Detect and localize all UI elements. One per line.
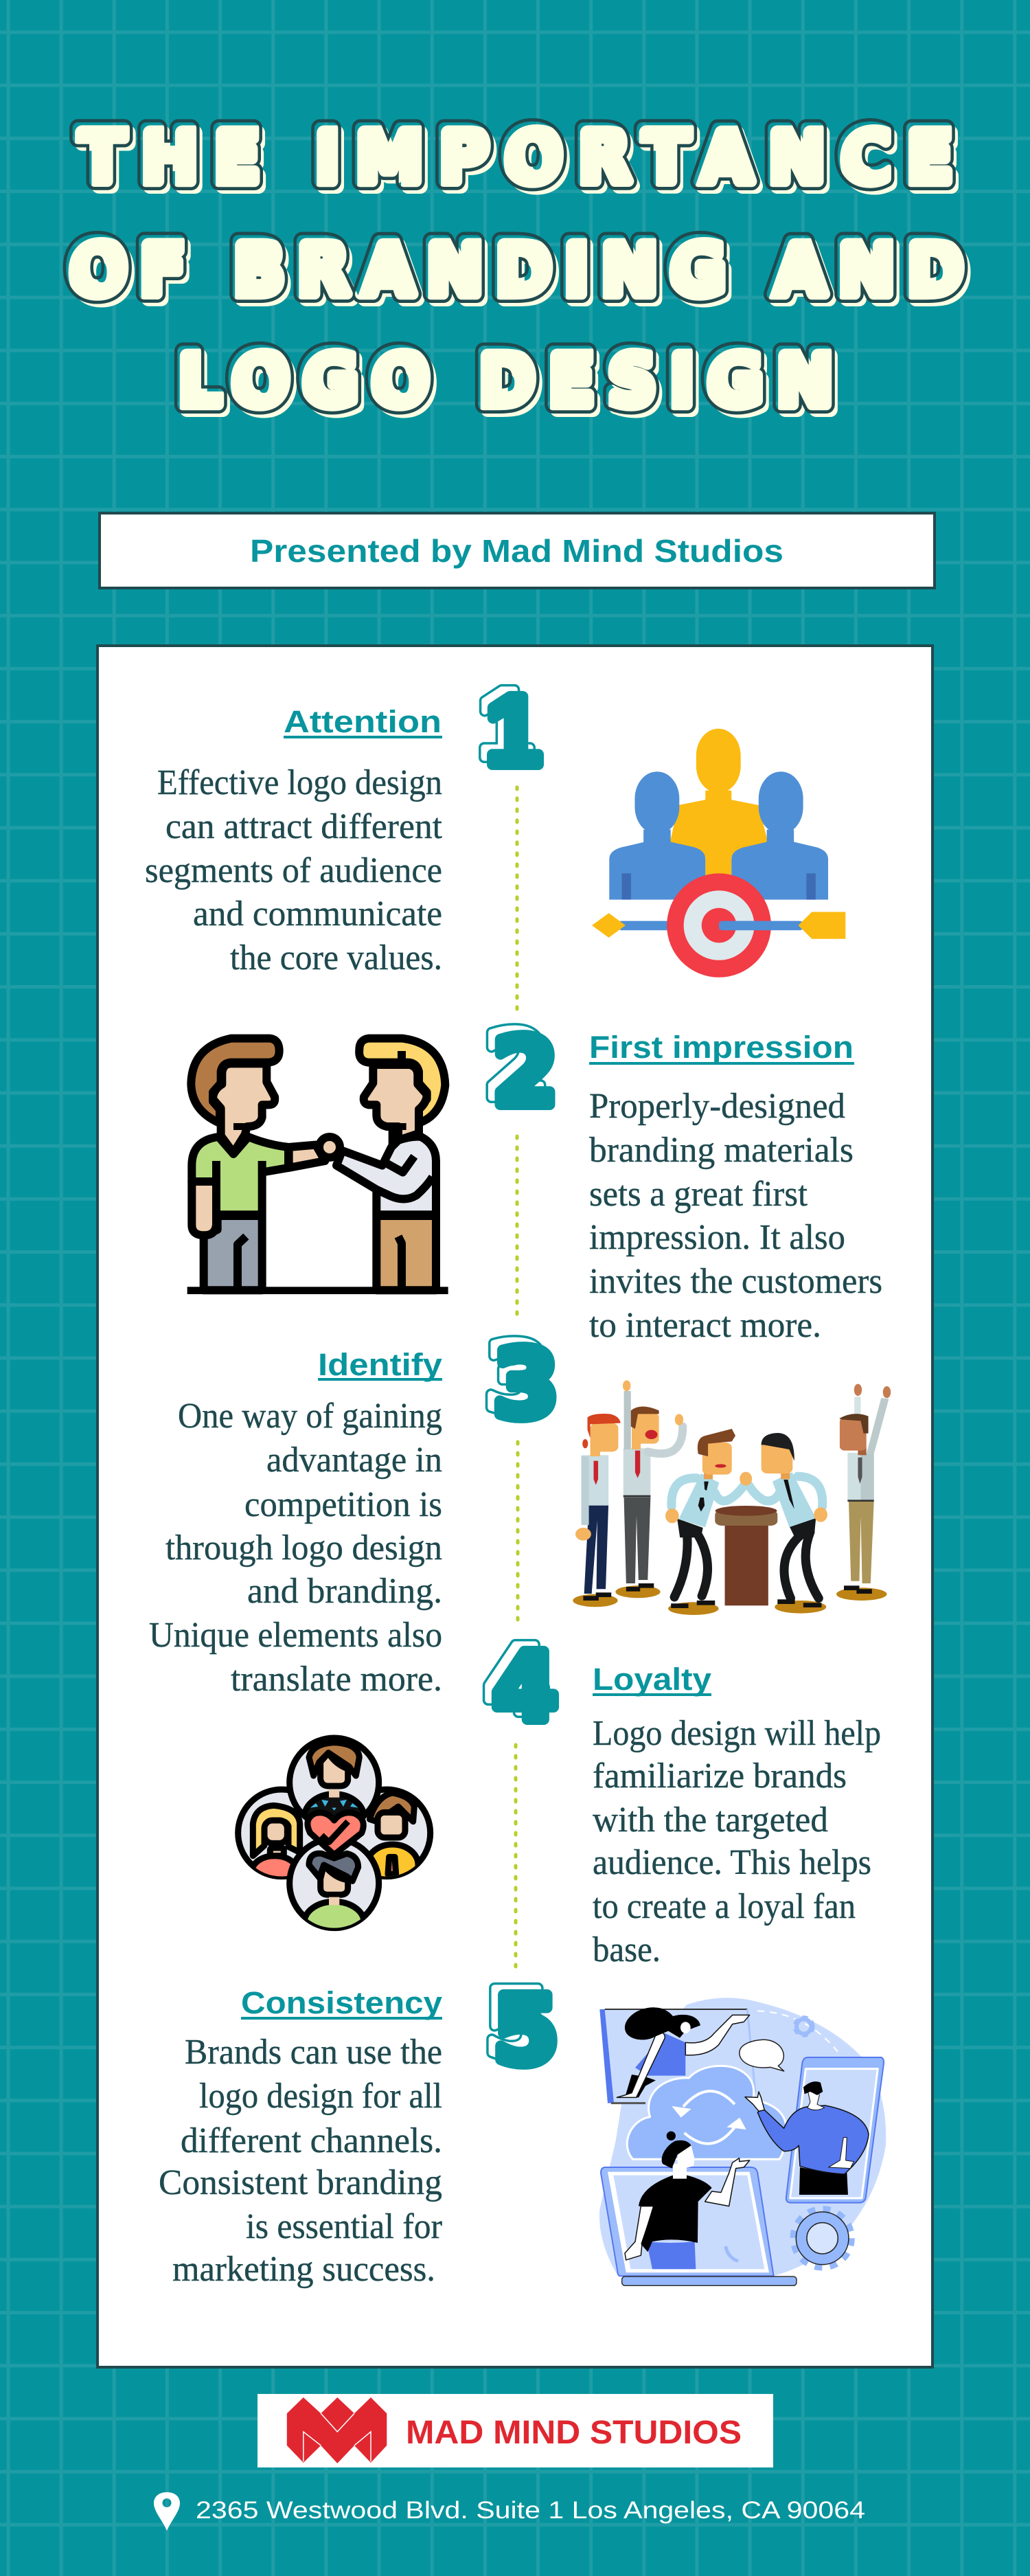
text: identify body: Unique elements also [149, 1616, 442, 1655]
number 3: 3 [494, 1331, 558, 1439]
text: loyalty body: with the targeted [593, 1800, 828, 1840]
address: 2365 Westwood Blvd. Suite 1 Los Angeles, CA 90064 [196, 2497, 865, 2524]
text: consistency body: is essential for [246, 2207, 442, 2246]
heart [308, 1813, 363, 1855]
woman in window [617, 2007, 750, 2097]
text: attention body: segments of audience [145, 851, 442, 890]
text: first impression body: impression. It also [589, 1218, 845, 1257]
text: first impression body: to interact more. [589, 1306, 821, 1345]
section 2: first impression [187, 1012, 882, 1345]
icon: audience target [592, 729, 845, 978]
number 4: 4 [484, 1627, 549, 1735]
section 3: identify [149, 1324, 891, 1699]
icon: handshake [187, 1039, 448, 1294]
heading: attention: Attention [284, 704, 442, 739]
text: consistency body: different channels. [181, 2121, 442, 2160]
icon: loyal audience [238, 1738, 431, 1943]
man with raised arms [836, 1384, 891, 1601]
gear [793, 2209, 851, 2268]
number 1: 1 [478, 668, 533, 779]
text: loyalty body: base. [593, 1930, 661, 1969]
number 4: 4 [484, 1627, 549, 1735]
text: loyalty body: Logo design will help [593, 1714, 881, 1753]
text: identify body: and branding. [247, 1572, 442, 1611]
text: identify body: One way of gaining [178, 1397, 442, 1436]
left avatar [235, 1786, 313, 1879]
text: identify body [149, 1397, 442, 1699]
text: first impression body: sets a great first [589, 1175, 808, 1214]
laptop with woman [601, 2132, 774, 2276]
left man [191, 1039, 325, 1290]
number 3: 3 [485, 1324, 549, 1432]
icon: location pin [154, 2492, 180, 2531]
text: identify body: competition is [244, 1485, 442, 1524]
wrestler right [748, 1433, 827, 1614]
text: consistency body: Brands can use the [185, 2033, 442, 2072]
title: OF BRANDING AND [72, 232, 967, 317]
text: consistency body: Consistent branding [159, 2163, 442, 2202]
phone with man [745, 2057, 884, 2203]
text: first impression body: invites the customers [589, 1262, 882, 1301]
heading: loyalty: Loyalty [593, 1662, 711, 1697]
text: attention body [145, 763, 443, 978]
title: THE IMPORTANCE [82, 120, 957, 204]
text: attention body: and communicate [193, 894, 442, 934]
number 3: 3 [485, 1324, 549, 1432]
number 4: 4 [493, 1634, 558, 1742]
top avatar [290, 1738, 379, 1840]
address [154, 2492, 865, 2531]
text: consistency body: marketing success. [172, 2250, 435, 2289]
text: loyalty body: familiarize brands [593, 1756, 847, 1796]
icon: cloud collaboration [599, 1998, 886, 2285]
text: consistency body: logo design for all [199, 2077, 442, 2116]
heading: identify: Identify [318, 1347, 442, 1382]
section 4: loyalty [238, 1627, 881, 1971]
section 1: attention [145, 668, 845, 1013]
man shouting [615, 1380, 683, 1598]
text: first impression body: Properly-designed [589, 1087, 845, 1126]
number 5: 5 [485, 1970, 549, 2079]
section 5: consistency [159, 1970, 886, 2289]
wrestler left [665, 1429, 744, 1615]
text: identify body: through logo design [165, 1528, 442, 1568]
heading: consistency: Consistency [241, 1985, 442, 2020]
number 5: 5 [494, 1977, 558, 2086]
text: attention body: the core values. [230, 938, 442, 978]
footer logo: MAD MIND STUDIOS [406, 2415, 742, 2451]
number 1: 1 [486, 675, 541, 786]
right man [319, 1039, 445, 1290]
text: loyalty body: to create a loyal fan [593, 1887, 856, 1926]
heading: first impression: First impression [589, 1030, 854, 1065]
right avatar [356, 1786, 434, 1879]
text: first impression body [589, 1087, 882, 1345]
text: identify body: translate more. [231, 1660, 442, 1699]
number 2: 2 [493, 1019, 558, 1127]
main white panel [98, 646, 932, 2367]
icon: arm wrestling competition [573, 1380, 891, 1615]
cloud [627, 2066, 786, 2159]
title [63, 118, 971, 418]
text: loyalty body: audience. This helps [593, 1843, 871, 1882]
text: consistency body [159, 2033, 442, 2289]
number 2: 2 [484, 1012, 549, 1120]
subtitle banner: Presented by Mad Mind Studios [250, 533, 783, 569]
text: identify body: advantage in [266, 1440, 442, 1480]
small gear [794, 2018, 813, 2035]
text: attention body: can attract different [165, 807, 443, 846]
text: first impression body: branding materials [589, 1131, 854, 1170]
number 2: 2 [484, 1012, 549, 1120]
number 1: 1 [478, 668, 533, 779]
text: attention body: Effective logo design [157, 763, 442, 802]
top-left window [599, 2009, 757, 2103]
logo mark [287, 2397, 387, 2463]
bottom avatar [290, 1839, 379, 1943]
man with red hair [573, 1414, 621, 1607]
footer logo [258, 2394, 773, 2467]
table [715, 1506, 777, 1605]
speech bubble [740, 2040, 784, 2071]
subtitle banner [100, 513, 935, 588]
text: loyalty body [593, 1714, 881, 1969]
title: LOGO DESIGN [181, 343, 837, 427]
number 5: 5 [485, 1970, 549, 2079]
